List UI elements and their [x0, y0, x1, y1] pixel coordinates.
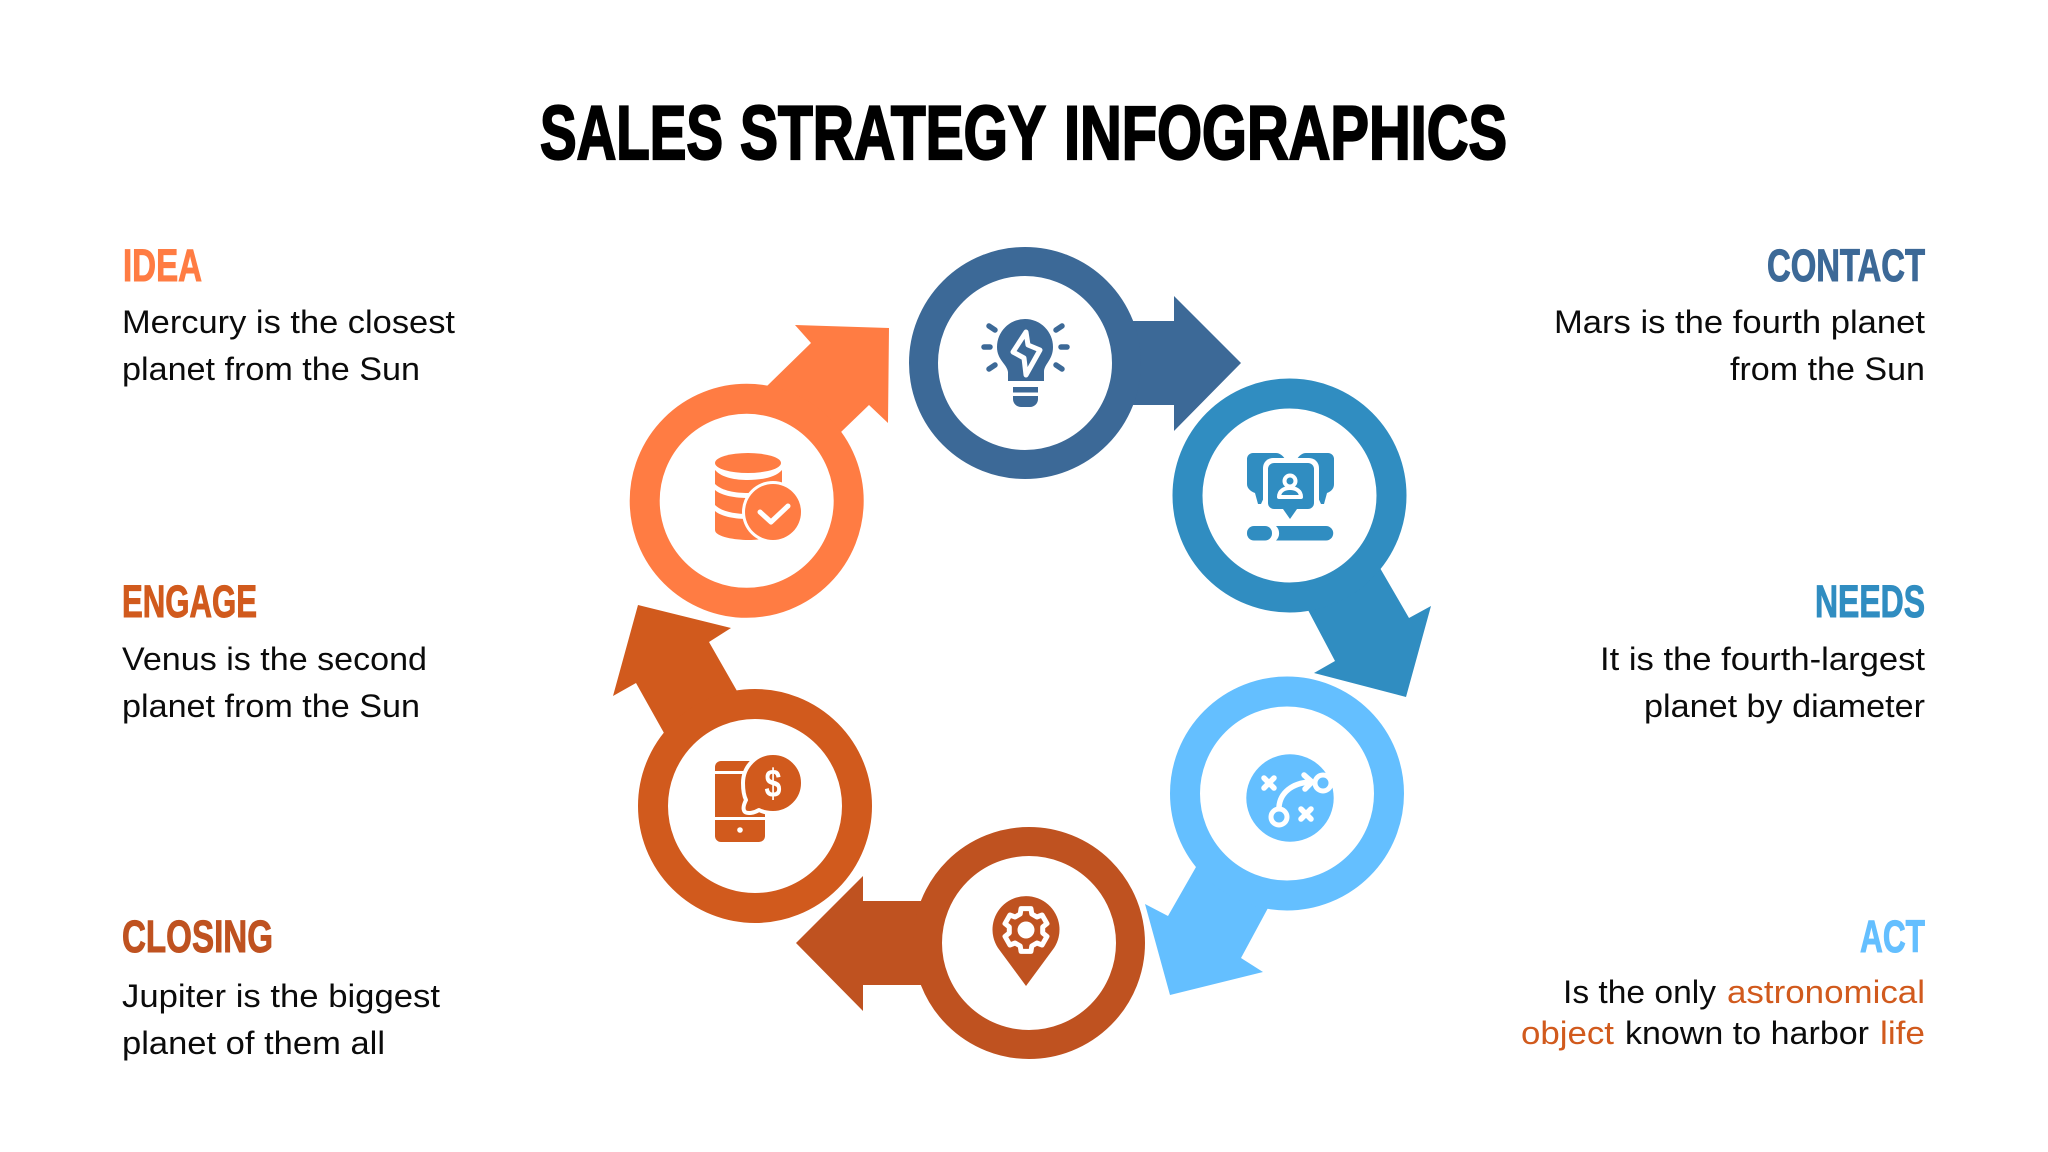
description: needs: planet by diameter: [1644, 688, 1925, 724]
description: act: known to harbor: [1625, 1015, 1869, 1051]
ring: act: [1185, 692, 1389, 896]
icon: gear pin: [992, 896, 1060, 986]
description: needs: [1600, 641, 1925, 724]
title: INFOGRAPHICS: [1064, 91, 1507, 176]
description: contact: from the Sun: [1730, 351, 1925, 387]
arrow: idea ring pointing up-right: [747, 325, 889, 501]
step: closing ring (bottom): [796, 842, 1130, 1044]
description: idea: Mercury is the closest: [122, 304, 455, 340]
step: engage ring (lower left): [613, 605, 857, 908]
text block: engage: [122, 576, 427, 724]
description: closing: planet of them all: [122, 1025, 385, 1061]
dollar sign: $: [764, 762, 782, 806]
ring: top: [924, 262, 1126, 464]
description: act: object: [1521, 1015, 1614, 1051]
description: needs: It is the fourth-largest: [1600, 641, 1925, 677]
ring: engage: [653, 704, 857, 908]
description: contact: [1554, 304, 1925, 387]
heading: idea: IDEA: [123, 240, 202, 291]
description: closing: Jupiter is the biggest: [122, 978, 440, 1014]
ring: contact: [1188, 394, 1392, 598]
arrow: closing ring pointing left: [796, 876, 1029, 1011]
description: act: [1521, 974, 1925, 1051]
text block: needs: [1600, 576, 1925, 724]
icon: strategy play: [1246, 754, 1334, 842]
description: act: Is the only: [1563, 974, 1717, 1010]
description: contact: Mars is the fourth planet: [1554, 304, 1925, 340]
description: closing: [122, 978, 440, 1061]
heading: closing: CLOSING: [122, 911, 273, 962]
heading: act: ACT: [1860, 911, 1925, 962]
description: act: life: [1880, 1015, 1925, 1051]
heading: contact: CONTACT: [1767, 240, 1925, 291]
arrow: contact ring pointing down: [1289, 495, 1431, 697]
step: act ring (lower right): [1145, 692, 1389, 995]
icon: phone with dollar bubble: [715, 753, 803, 842]
description: engage: [122, 641, 427, 724]
step: idea bulb ring (top): [924, 262, 1241, 464]
arrow: top ring pointing right: [1025, 296, 1241, 431]
heading: needs: NEEDS: [1815, 576, 1925, 627]
description: idea: [122, 304, 455, 387]
icon: contact bubbles: [1247, 453, 1334, 540]
text block: idea: [122, 240, 455, 387]
ring: closing: [928, 842, 1130, 1044]
title: STRATEGY: [740, 91, 1046, 176]
description: idea: planet from the Sun: [122, 351, 420, 387]
ring: idea: [645, 399, 849, 603]
description: engage: planet from the Sun: [122, 688, 420, 724]
text block: contact: [1554, 240, 1925, 387]
step: idea ring (upper left): [645, 325, 889, 603]
description: engage: Venus is the second: [122, 641, 427, 677]
arrow: act ring pointing down-left: [1145, 793, 1287, 995]
title: SALES: [540, 91, 723, 176]
title: [540, 91, 1507, 176]
icon: light bulb: [984, 319, 1067, 407]
text block: closing: [122, 911, 440, 1061]
step: contact ring (upper right): [1188, 394, 1431, 697]
description: act: astronomical: [1727, 974, 1925, 1010]
heading: engage: ENGAGE: [122, 576, 257, 627]
text block: act: [1521, 911, 1925, 1051]
arrow: engage ring pointing up: [613, 605, 755, 806]
icon: database with check: [715, 453, 804, 543]
